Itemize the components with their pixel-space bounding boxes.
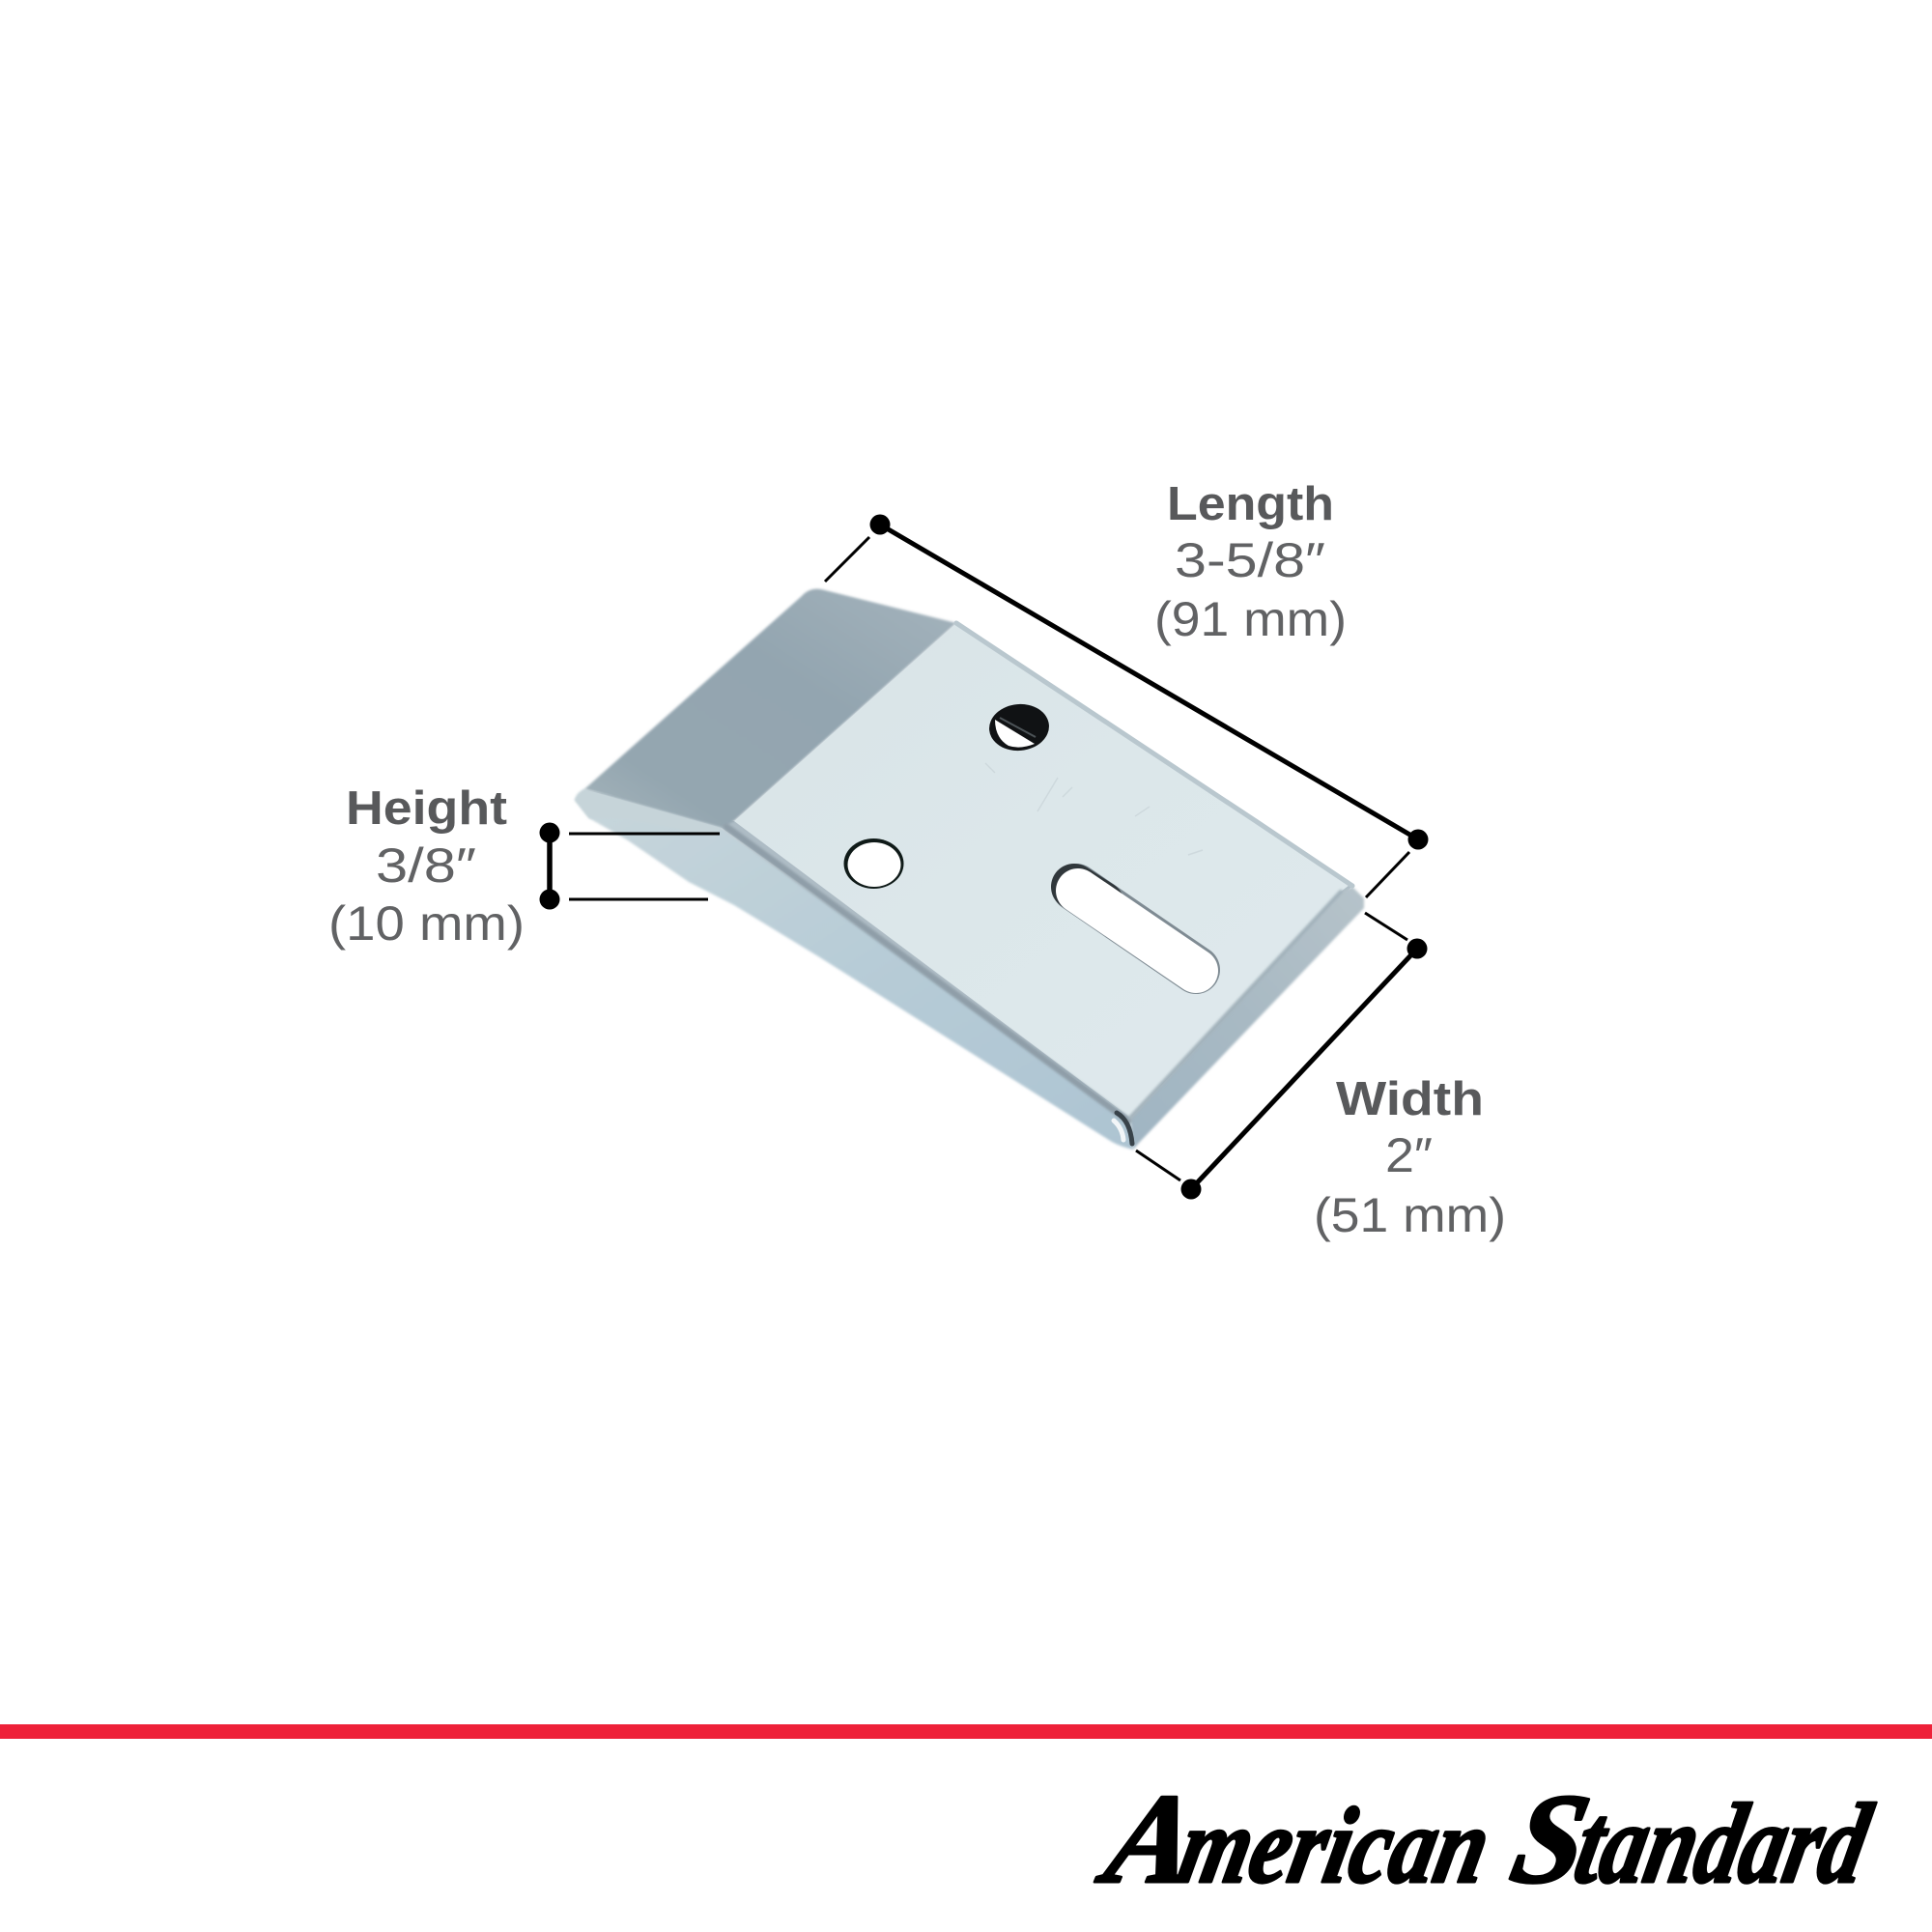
width extension ticks <box>1136 913 1407 1180</box>
red footer rule <box>0 1724 1932 1739</box>
width label: 2″ <box>1385 1128 1433 1182</box>
height line with end dots <box>539 823 560 910</box>
brand logo: merican <box>1170 1786 1500 1906</box>
length extension ticks <box>825 537 1409 897</box>
height label <box>328 782 525 951</box>
length label <box>1154 478 1347 646</box>
bracket front sloped face <box>575 789 1133 1150</box>
product photo: zinc plated metal bracket <box>575 589 1364 1150</box>
bracket edge bevels <box>726 623 1352 1144</box>
brand logo: S <box>1501 1768 1601 1911</box>
height label: Height <box>346 782 507 835</box>
width line with end dots <box>1180 939 1428 1200</box>
height extension lines <box>569 834 720 899</box>
bracket flat top face <box>734 623 1350 1118</box>
round hole with screw shadow <box>987 701 1051 753</box>
brand logo <box>1089 1768 1882 1911</box>
length label: 3-5/8″ <box>1175 533 1325 587</box>
width label: Width <box>1336 1073 1484 1125</box>
length label: (91 mm) <box>1154 592 1347 646</box>
height label: 3/8″ <box>376 838 476 893</box>
bracket silhouette underlay <box>584 623 1352 1118</box>
dimension: width <box>1136 913 1506 1242</box>
brand logo: A <box>1089 1768 1210 1911</box>
surface scratches <box>985 763 1203 855</box>
length label: Length <box>1167 478 1334 530</box>
length line with end dots <box>869 514 1428 850</box>
width label <box>1314 1073 1506 1242</box>
bracket rear angled face <box>584 589 956 828</box>
oblong slot <box>1074 887 1196 971</box>
dimension: height <box>328 782 720 951</box>
bracket light front lip <box>575 789 722 837</box>
bracket right edge face <box>1130 887 1364 1150</box>
round through hole <box>844 838 904 889</box>
height label: (10 mm) <box>328 896 525 951</box>
width label: (51 mm) <box>1314 1188 1506 1242</box>
dimension: length <box>825 478 1428 897</box>
